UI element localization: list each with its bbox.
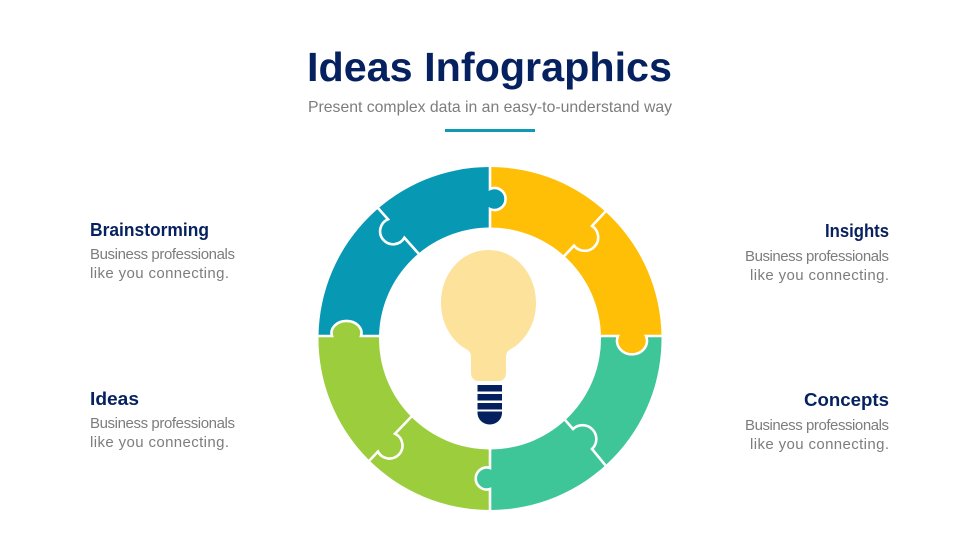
- body: Insights: like you connecting.: [750, 267, 889, 284]
- subtitle: Present complex data in an easy-to-understand way: [308, 99, 672, 116]
- body: Ideas: [90, 415, 235, 451]
- body: Concepts: like you connecting.: [750, 436, 889, 453]
- puzzle knob: green into teal: [316, 321, 381, 336]
- puzzle knob: teal into yellow: [490, 164, 506, 230]
- puzzle segment: mint: [490, 336, 662, 510]
- body: Insights: [745, 248, 889, 284]
- puzzle ring chart: [316, 164, 664, 513]
- body: Ideas: Business professionals: [90, 415, 235, 432]
- title: Ideas Infographics: [307, 44, 672, 90]
- icon: light bulb: [441, 250, 536, 424]
- body: Concepts: [745, 417, 889, 453]
- body: Ideas: like you connecting.: [90, 434, 229, 451]
- puzzle segment: yellow: [490, 167, 662, 336]
- heading: Brainstorming: Brainstorming: [90, 219, 209, 240]
- heading: Insights: Insights: [825, 220, 889, 241]
- text block: Concepts: [745, 389, 889, 453]
- body: Concepts: Business professionals: [745, 417, 889, 434]
- puzzle knob: green seam: [368, 416, 412, 462]
- heading: Concepts: Concepts: [804, 389, 889, 410]
- heading: Ideas: Ideas: [90, 388, 139, 409]
- body: Insights: Business professionals: [745, 248, 889, 265]
- body: Brainstorming: Business professionals: [90, 246, 235, 263]
- body: Brainstorming: like you connecting.: [90, 265, 229, 282]
- bulb base: [478, 385, 502, 424]
- bulb glass: [441, 250, 536, 381]
- text block: Brainstorming: [90, 219, 235, 282]
- puzzle segment: teal: [318, 167, 490, 336]
- puzzle knob: yellow seam: [562, 209, 608, 258]
- text block: Insights: [745, 220, 889, 284]
- puzzle knob: teal seam: [375, 205, 420, 256]
- puzzle knob: mint into green: [476, 447, 490, 513]
- puzzle segment: green: [318, 336, 490, 510]
- body: Brainstorming: [90, 246, 235, 282]
- puzzle knob: mint seam: [564, 418, 608, 468]
- text block: Ideas: [90, 388, 235, 451]
- puzzle knob: yellow into mint: [598, 336, 664, 354]
- accent rule: [445, 129, 535, 132]
